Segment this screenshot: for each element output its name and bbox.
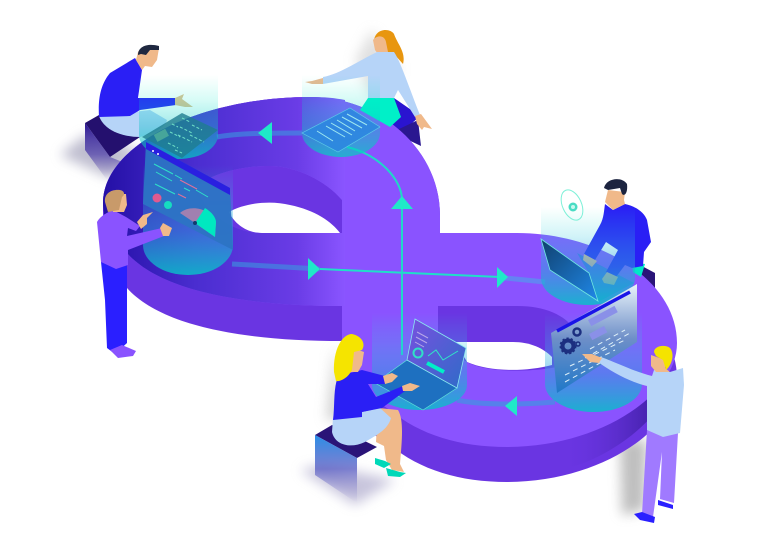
torso and arm xyxy=(598,357,684,437)
person: seated woman top right xyxy=(305,30,432,130)
person: seated man top left xyxy=(99,45,193,137)
head xyxy=(136,46,159,70)
skirt xyxy=(360,98,401,127)
hands xyxy=(137,212,153,229)
person: seated woman bottom xyxy=(315,334,420,503)
hair xyxy=(334,334,364,381)
head xyxy=(113,194,127,212)
glass cylinder: gear panel xyxy=(545,313,642,412)
pants xyxy=(642,430,678,517)
head xyxy=(373,36,388,54)
glass cylinder: right laptop xyxy=(541,207,635,305)
torso xyxy=(99,58,176,117)
laptop keyboard: right xyxy=(577,253,634,302)
glass cylinder: dashboard xyxy=(143,142,233,275)
keyboard xyxy=(142,113,218,158)
torso xyxy=(97,210,164,269)
seat: top left bench behind loop xyxy=(85,115,140,180)
bar xyxy=(427,363,444,372)
sweater xyxy=(323,52,420,117)
hands xyxy=(305,78,323,84)
head xyxy=(651,355,670,372)
shoes xyxy=(634,512,655,523)
laptop screen: right xyxy=(541,239,598,301)
text lines xyxy=(415,332,428,347)
gauge xyxy=(180,208,216,237)
donut xyxy=(414,348,422,358)
loop: top surface xyxy=(103,97,677,447)
shadow: soft ground shadows xyxy=(60,30,647,515)
person: standing person left xyxy=(97,190,172,358)
head xyxy=(605,190,625,210)
dashboard panel xyxy=(143,142,233,250)
pants xyxy=(101,262,127,354)
loop: extruded side wall xyxy=(103,97,677,482)
gears xyxy=(562,340,574,352)
legs xyxy=(376,408,404,472)
seat: right bench behind loop xyxy=(640,265,655,288)
laptop: lower xyxy=(375,319,466,410)
torso xyxy=(584,204,651,277)
shoes xyxy=(375,458,391,468)
arrow: lower path to laptop xyxy=(457,396,555,416)
arrow: vertical path curving to document xyxy=(347,147,413,355)
chart line xyxy=(428,350,458,360)
hands xyxy=(583,254,597,267)
glass cylinder: lower laptop xyxy=(372,313,467,410)
hand xyxy=(175,94,193,107)
icon: floating gear xyxy=(557,187,587,223)
glass cylinder: keyboard xyxy=(139,75,218,159)
top and arms xyxy=(333,370,405,420)
hair xyxy=(374,30,404,64)
pants xyxy=(632,262,645,277)
arrow: path from document to keyboard xyxy=(217,122,302,144)
loop: hole walls and openings xyxy=(196,166,575,370)
person: seated man right xyxy=(583,179,651,285)
head xyxy=(350,348,364,372)
arrow: horizontal path to the right xyxy=(232,258,545,288)
glass cylinder: document xyxy=(302,75,380,157)
person: standing man right xyxy=(582,346,684,523)
legs xyxy=(99,110,167,137)
hands xyxy=(383,373,398,384)
skirt xyxy=(332,408,391,445)
hand xyxy=(582,354,602,363)
document sheet xyxy=(302,108,380,152)
panel: settings screen xyxy=(551,284,637,393)
seat: top right bench behind loop xyxy=(380,98,421,146)
seat xyxy=(315,425,377,458)
